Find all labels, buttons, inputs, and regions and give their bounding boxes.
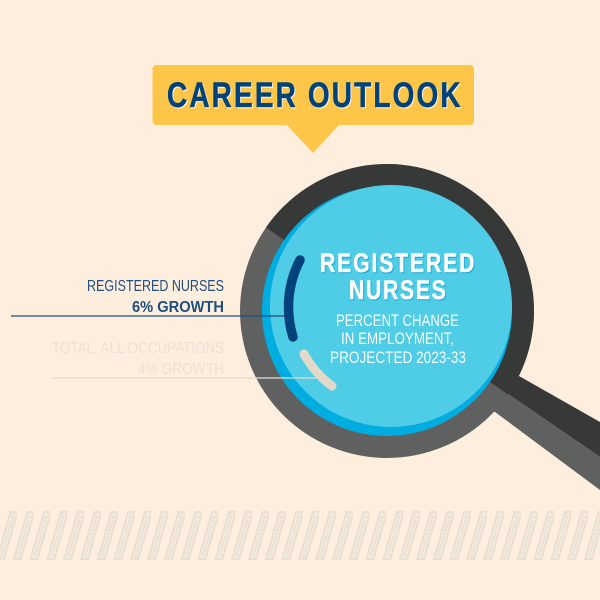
subtext line 3: PROJECTED 2023-33 [330, 348, 466, 367]
arc: registered nurses 6% [289, 260, 300, 337]
marker line: total occupations [52, 377, 318, 379]
label name: TOTAL, ALL OCCUPATIONS [52, 340, 224, 357]
label name: REGISTERED NURSES [87, 278, 224, 295]
label value: 6% GROWTH [132, 299, 224, 316]
lens rim: dark [266, 164, 534, 394]
subtext line 1: PERCENT CHANGE [336, 311, 459, 330]
marker line: registered nurses [11, 315, 288, 317]
label: registered nurses [87, 278, 224, 316]
lens rim: grey [240, 164, 534, 458]
heading line 1: REGISTERED [320, 249, 474, 279]
handle: dark upper half [492, 376, 600, 457]
heading line 2: NURSES [349, 276, 446, 306]
arc: total occupations 4% [304, 354, 332, 386]
label value: 4% GROWTH [138, 361, 224, 378]
lens: light blue face [270, 185, 512, 427]
handle: grey lower half [470, 383, 600, 490]
title banner [152, 65, 474, 153]
lens subtext [330, 311, 466, 367]
label: total occupations [52, 340, 224, 378]
banner speech bubble [152, 65, 474, 153]
title: CAREER OUTLOOK [167, 75, 461, 115]
lens: blue crescent [262, 186, 512, 436]
decorative hatched band [0, 511, 600, 560]
subtext line 2: IN EMPLOYMENT, [341, 329, 454, 348]
magnifying glass [240, 164, 600, 490]
lens heading [320, 249, 474, 306]
